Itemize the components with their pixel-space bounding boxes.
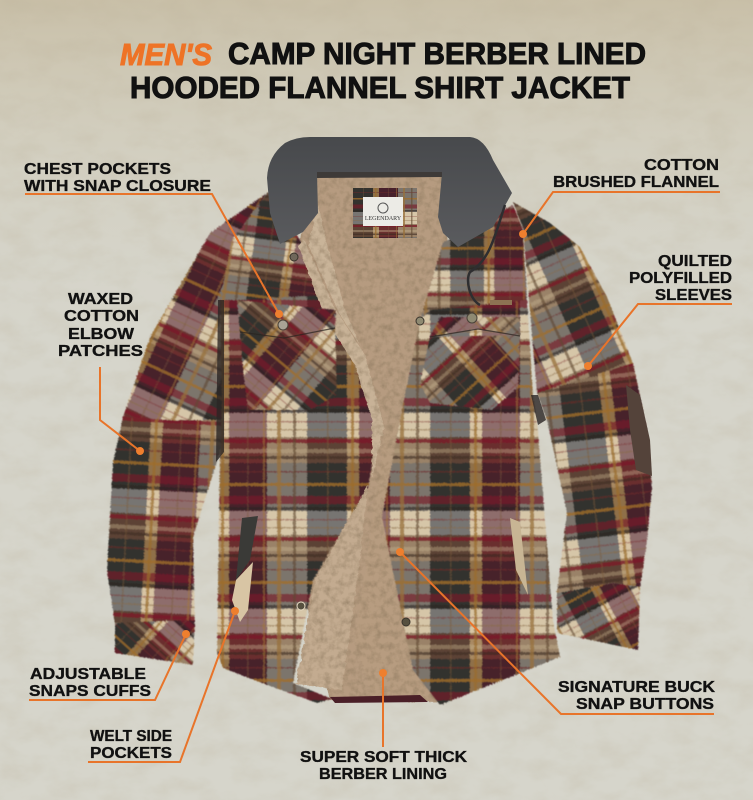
title <box>120 36 646 105</box>
callout: welt side pockets: WELT SIDE <box>90 728 172 745</box>
left body panel <box>217 192 380 703</box>
right chest pocket <box>420 300 520 410</box>
callout: waxed cotton elbow patches: WAXED <box>68 291 133 308</box>
neck label <box>353 188 417 238</box>
callout: quilted polyfilled sleeves: SLEEVES <box>655 287 732 304</box>
callout: signature buck snap buttons <box>396 548 715 714</box>
left chest pocket <box>237 300 337 410</box>
callout: cotton brushed flannel: COTTON <box>644 157 719 174</box>
hood drawstring <box>468 205 505 305</box>
callout: welt side pockets <box>88 607 239 762</box>
berber lining back <box>300 170 448 702</box>
right cuff <box>557 583 640 650</box>
left cuff <box>115 620 195 665</box>
right armhole shadow <box>531 395 546 425</box>
title: CAMP NIGHT BERBER LINED <box>228 36 646 71</box>
callout: waxed cotton elbow patches: PATCHES <box>58 343 143 360</box>
callout: cotton brushed flannel <box>519 157 720 238</box>
collar and placket snaps <box>290 253 424 626</box>
callout: super soft thick berber lining: SUPER SOFT THICK <box>300 749 467 766</box>
left armhole shadow <box>216 300 224 462</box>
title: MEN'S <box>120 37 212 72</box>
callout: adjustable snaps cuffs: SNAPS CUFFS <box>29 683 151 700</box>
right sleeve <box>513 202 652 650</box>
callout: signature buck snap buttons: SNAP BUTTONS <box>576 696 714 713</box>
callout: chest pockets: WITH SNAP CLOSURE <box>24 178 211 195</box>
callout: super soft thick berber lining: BERBER LINING <box>319 766 447 783</box>
elbow patch <box>626 385 652 476</box>
jacket illustration <box>107 137 652 705</box>
callout: chest pockets: CHEST POCKETS <box>24 161 171 178</box>
callout: quilted polyfilled sleeves <box>584 253 732 370</box>
callout: waxed cotton elbow patches: ELBOW <box>68 326 135 343</box>
callout: waxed cotton elbow patches: COTTON <box>64 308 139 325</box>
callout: signature buck snap buttons: SIGNATURE BUCK <box>558 679 715 696</box>
left panel fold lining <box>296 205 384 690</box>
callout: adjustable snaps cuffs: ADJUSTABLE <box>30 666 146 683</box>
callout: super soft thick berber lining <box>300 669 467 783</box>
callout: adjustable snaps cuffs <box>29 630 190 700</box>
callout: welt side pockets: POCKETS <box>90 745 172 762</box>
right body panel <box>382 205 560 705</box>
callout: quilted polyfilled sleeves: QUILTED <box>658 253 732 270</box>
callout: quilted polyfilled sleeves: POLYFILLED <box>629 270 732 287</box>
callout: cotton brushed flannel: BRUSHED FLANNEL <box>553 174 719 191</box>
callout: chest pockets <box>24 161 283 318</box>
title: HOODED FLANNEL SHIRT JACKET <box>130 70 630 105</box>
side welt pockets <box>232 516 528 622</box>
lining bottom hem <box>330 695 428 703</box>
left sleeve <box>107 193 267 665</box>
callout: waxed cotton elbow patches <box>58 291 144 455</box>
neck label: LEGENDARY <box>365 216 402 222</box>
hood <box>267 137 512 305</box>
